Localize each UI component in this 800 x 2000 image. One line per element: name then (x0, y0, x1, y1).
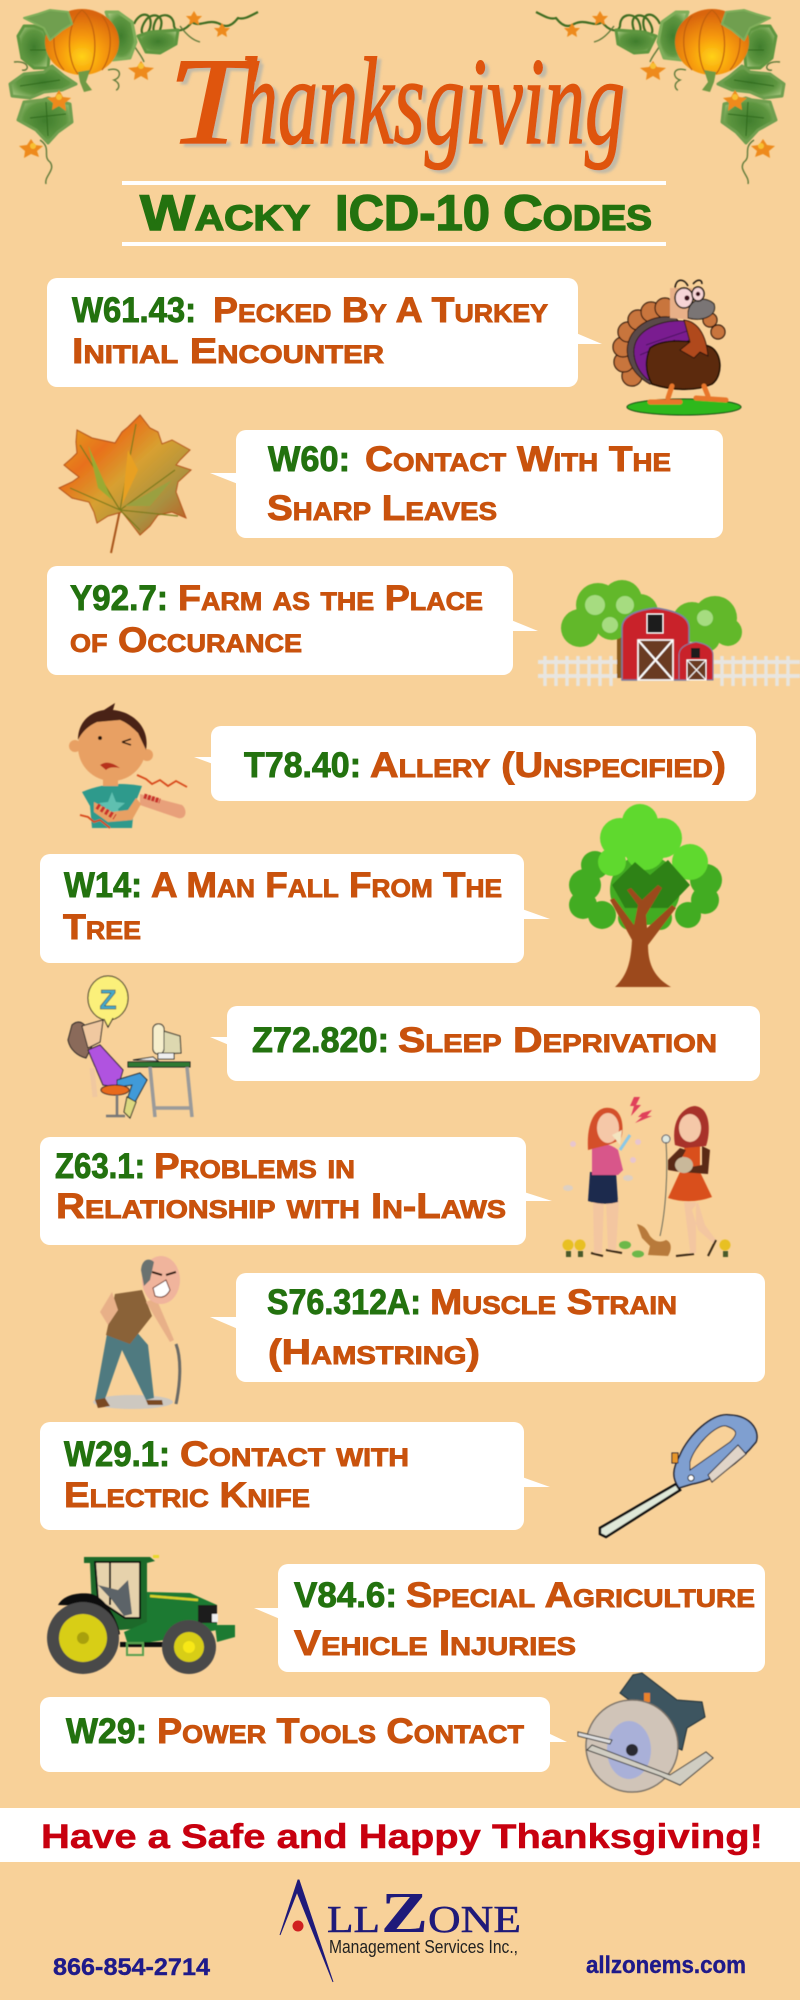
icon: two women with dog (562, 1097, 730, 1258)
card: W61.43: Initial Encounter (72, 332, 384, 371)
card: W29.1: Electric Knife (64, 1476, 310, 1515)
card: Z72.820 (210, 1006, 760, 1081)
card: V84.6: Vehicle Injuries (294, 1624, 576, 1663)
card: V84.6: Special Agriculture (406, 1576, 755, 1615)
icon: tractor (47, 1555, 235, 1674)
card: W29: W29: (66, 1712, 147, 1751)
card: W61.43: Pecked By A Turkey (213, 291, 548, 330)
card: W14: A Man Fall From The (151, 866, 502, 905)
icon: pumpkin vine corner right (536, 9, 784, 184)
card: Z63.1: Problems in (154, 1147, 355, 1186)
card: W14: W14: (64, 866, 142, 905)
icon: barn with trees (538, 580, 800, 686)
card: Y92.7: Y92.7: (70, 579, 168, 618)
icon: circular saw (578, 1673, 713, 1792)
card: S76.312A: (Hamstring) (268, 1333, 480, 1372)
subtitle: Codes (503, 185, 652, 241)
icon: old man with cane (93, 1256, 180, 1409)
icon: sleeping at computer: Z (99, 984, 117, 1015)
card: Z63.1 (40, 1137, 552, 1245)
card: S76.312A (210, 1273, 765, 1382)
subtitle: Wacky (140, 185, 310, 241)
icon: tree (569, 804, 722, 987)
icon: turkey (613, 280, 741, 415)
card: Z72.820: Sleep Deprivation (398, 1021, 717, 1060)
card: W29.1 (40, 1422, 550, 1530)
card: Z72.820: Z72.820: (252, 1021, 389, 1060)
card: W60: W60: (268, 440, 350, 479)
card: W29.1: W29.1: (64, 1435, 170, 1474)
card: W14 (40, 854, 550, 963)
card: W60: Sharp Leaves (267, 489, 497, 528)
icon: allergic boy (69, 703, 187, 828)
card: W61.43: W61.43: (72, 291, 196, 330)
card: W29: Power Tools Contact (157, 1712, 524, 1751)
logo: AllZone: LL (327, 1899, 380, 1941)
subtitle: ICD-10 (335, 185, 490, 241)
card: W60 (210, 430, 723, 538)
card: T78.40: Allery (Unspecified) (370, 746, 726, 785)
icon: maple leaf (59, 415, 191, 553)
closing banner (0, 1808, 800, 1862)
card: W60: Contact With The (365, 440, 671, 479)
card: W61.43 (47, 278, 602, 387)
card: Y92.7: Farm as the Place (178, 579, 483, 618)
card: W29.1: Contact with (180, 1435, 409, 1474)
card: S76.312A: S76.312A: (267, 1283, 421, 1322)
card: T78.40: T78.40: (244, 746, 361, 785)
icon: sleeping at computer (68, 976, 192, 1118)
card: W29 (40, 1697, 567, 1772)
card: W14: Tree (63, 908, 141, 947)
subtitle block (122, 181, 666, 246)
logo: AllZone: Management Services Inc., (329, 1937, 518, 1957)
logo: AllZone (280, 1880, 521, 1982)
title: T (168, 33, 260, 170)
phone number: 866-854-2714 (53, 1954, 211, 1981)
logo: AllZone: Z (381, 1880, 428, 1945)
icon: pumpkin vine corner left (10, 9, 258, 184)
icon: electric knife (600, 1415, 757, 1537)
card: Z63.1: Z63.1: (55, 1147, 145, 1186)
card: S76.312A: Muscle Strain (430, 1283, 677, 1322)
card: Z63.1: Relationship with In-Laws (56, 1187, 506, 1226)
card: V84.6: V84.6: (294, 1576, 397, 1615)
card: V84.6 (254, 1564, 765, 1672)
card: T78.40 (194, 726, 756, 801)
logo: AllZone: ONE (428, 1899, 521, 1941)
closing message: Have a Safe and Happy Thanksgiving! (41, 1818, 763, 1856)
website: allzonems.com (586, 1952, 746, 1979)
card: Y92.7 (47, 566, 538, 675)
card: Y92.7: of Occurance (70, 621, 302, 660)
